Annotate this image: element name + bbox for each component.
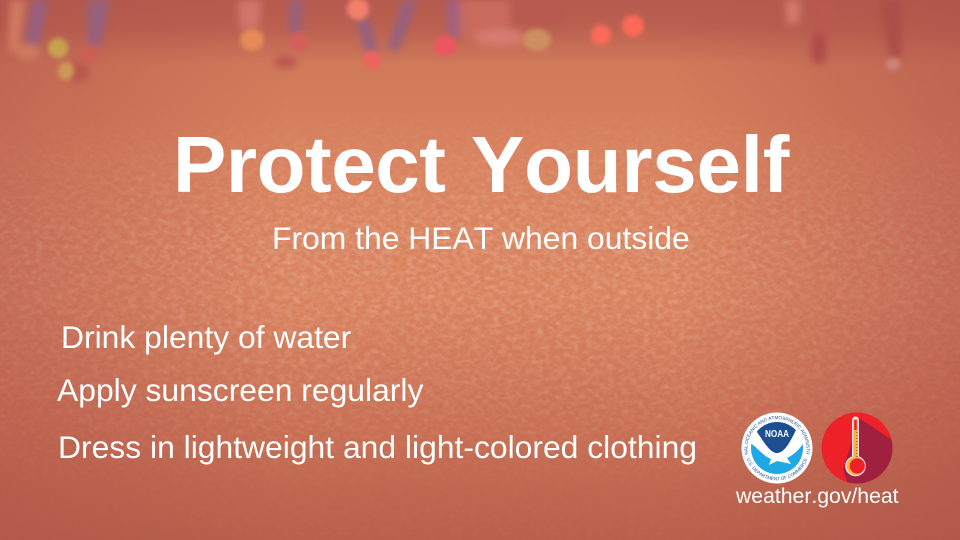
icon: NOAA logo: NOAA xyxy=(765,429,789,440)
icon: NOAA logo: U.S. DEPARTMENT OF COMMERCE xyxy=(747,458,808,480)
tip: water: Drink plenty of water xyxy=(61,319,351,355)
website link: weather.gov/heat xyxy=(736,485,899,508)
title xyxy=(173,120,790,209)
title: Yourself xyxy=(471,120,789,209)
subtitle: From the HEAT when outside xyxy=(272,220,690,256)
icon: NOAA logo xyxy=(742,412,812,484)
tip: clothing: Dress in lightweight and light-colored clothing xyxy=(58,429,697,465)
tip: sunscreen: Apply sunscreen regularly xyxy=(57,372,423,408)
title: Protect xyxy=(173,120,445,209)
icon: thermometer xyxy=(822,412,892,484)
